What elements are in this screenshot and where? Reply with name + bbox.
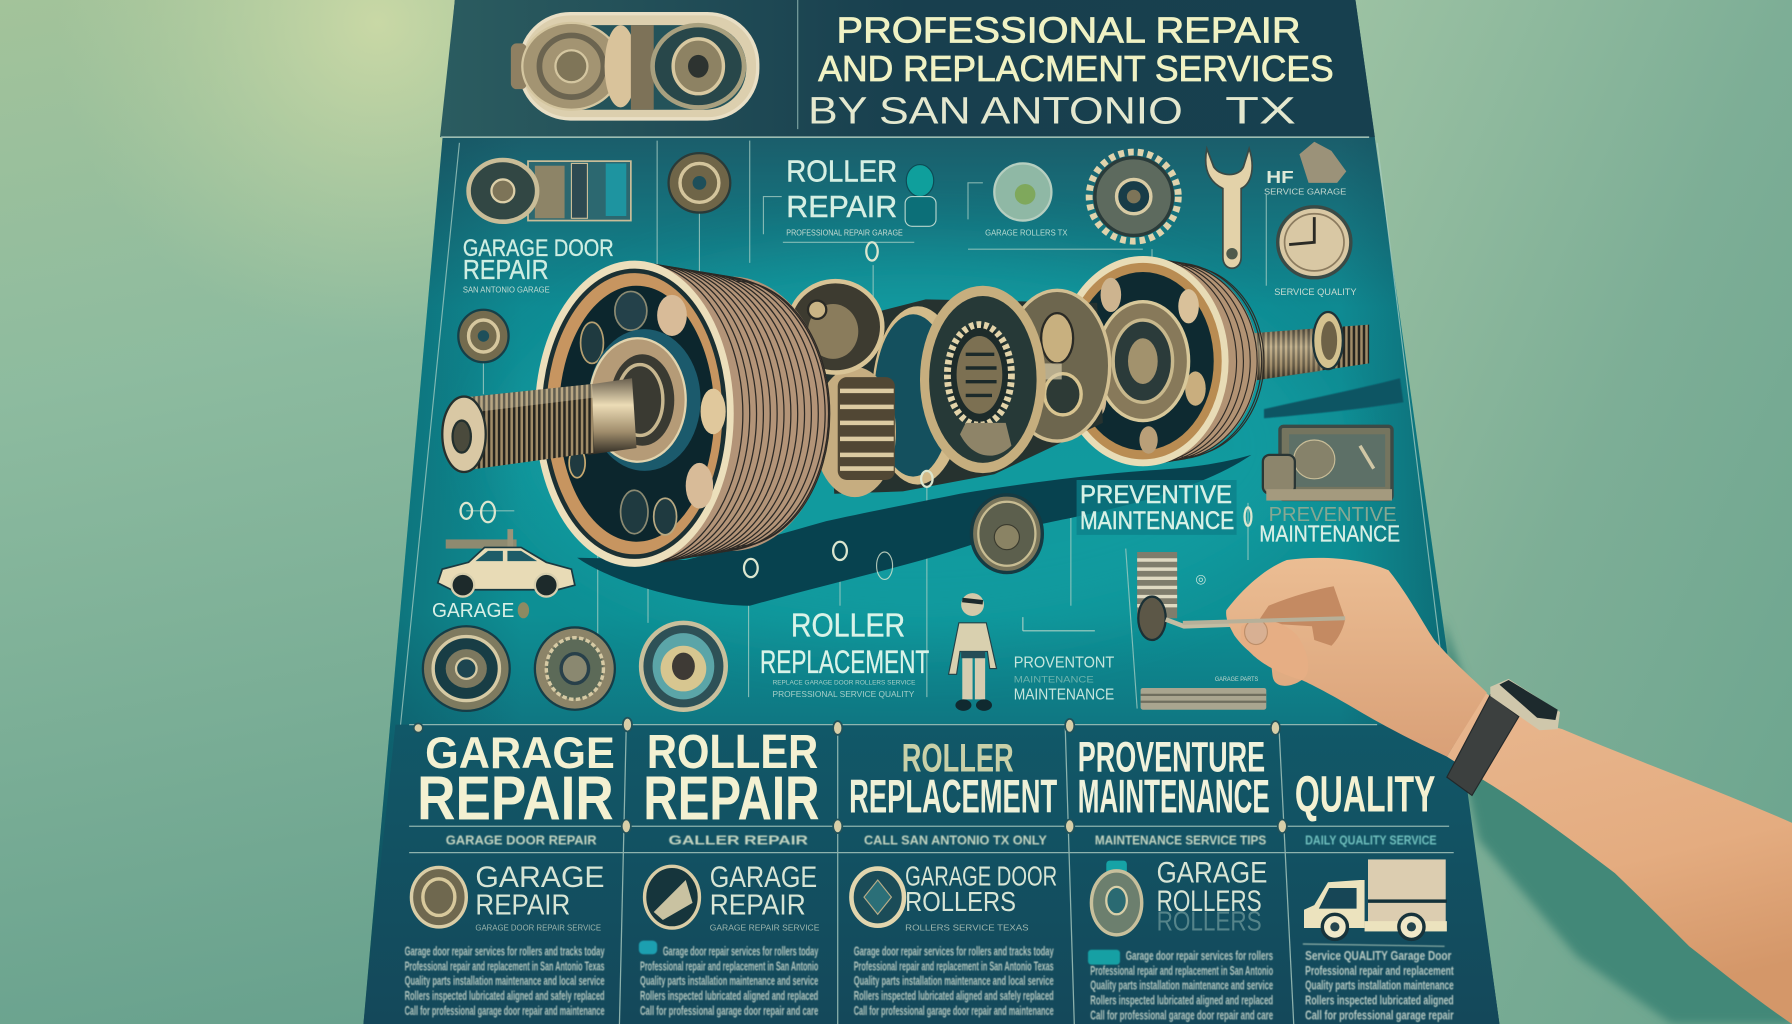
label: garage repair column two: GARAGE REPAIR SERVICE bbox=[710, 923, 819, 932]
disc A bbox=[789, 281, 882, 373]
icon: column four medallion bbox=[1091, 861, 1142, 935]
header band bbox=[440, 0, 1375, 137]
icon: disk three bbox=[641, 623, 726, 710]
label: proventont maintenance: MAINTENANCE bbox=[1014, 674, 1094, 684]
label: garage door rollers bbox=[905, 861, 1057, 932]
body text: column five bbox=[1303, 944, 1454, 1022]
label: roller replacement: ROLLER bbox=[791, 608, 905, 645]
top row icon: wheel and door unit bbox=[469, 160, 631, 222]
label: roller repair: REPAIR bbox=[786, 189, 897, 224]
hand and arm bbox=[1183, 558, 1792, 1024]
label: garage door rollers: ROLLERS SERVICE TEXAS bbox=[905, 923, 1029, 932]
title: PROFESSIONAL REPAIR bbox=[837, 9, 1301, 50]
arm bbox=[1447, 693, 1792, 1024]
tool in hand bbox=[1183, 618, 1345, 623]
title: AND REPLACMENT SERVICES bbox=[818, 48, 1334, 89]
body text: column three: Rollers inspected lubricated aligned and safely replaced bbox=[854, 989, 1054, 1003]
icon: delivery truck bbox=[1304, 859, 1447, 939]
label: garage repair column one: GARAGE DOOR REPAIR SERVICE bbox=[475, 923, 601, 932]
thumb bbox=[1241, 620, 1308, 680]
face rim bbox=[535, 261, 734, 567]
column heading: roller repair bbox=[643, 726, 819, 833]
wall background right bbox=[1349, 0, 1792, 1024]
poster sheet bbox=[363, 0, 1499, 1024]
body text: column three: Professional repair and replacement in San Antonio Texas bbox=[854, 959, 1054, 973]
label: preventive maintenance: PREVENTIVE bbox=[1080, 481, 1232, 509]
column heading: proventure maintenance: PROVENTURE bbox=[1078, 733, 1265, 780]
icon: column two medallion bbox=[645, 866, 699, 928]
label: garage rollers: ROLLERS bbox=[1157, 905, 1262, 936]
label: preventive maintenance faded: MAINTENANCE bbox=[1259, 521, 1400, 547]
body text: column three: Call for professional garage door repair and maintenance bbox=[854, 1004, 1054, 1018]
sub heading strip: MAINTENANCE SERVICE TIPS bbox=[1095, 834, 1266, 848]
label: preventive maintenance faded: PREVENTIVE bbox=[1269, 503, 1397, 526]
label: garage door repair: GARAGE DOOR bbox=[463, 235, 614, 262]
title bbox=[808, 9, 1334, 131]
icon: floor disk bbox=[971, 495, 1042, 573]
label: garage rollers bbox=[1157, 856, 1267, 936]
main big roller wheel bbox=[442, 261, 830, 567]
label: roller replacement: PROFESSIONAL SERVICE QUALITY bbox=[773, 690, 915, 699]
body text: column two bbox=[639, 941, 818, 1018]
bearing holes bbox=[569, 291, 726, 535]
body text: column one: Professional repair and replacement in San Antonio Texas bbox=[405, 959, 605, 973]
label: garage: GARAGE bbox=[432, 599, 514, 622]
caption under clock: SERVICE QUALITY bbox=[1274, 287, 1357, 297]
icon: HF mark: HF bbox=[1266, 167, 1294, 187]
body text: column one: Garage door repair services for rollers and tracks today bbox=[405, 944, 605, 958]
sub heading strip: GARAGE DOOR REPAIR bbox=[446, 834, 597, 848]
icon: HF mark bbox=[1264, 142, 1346, 196]
body text: column four: Garage door repair services for rollers bbox=[1126, 949, 1273, 963]
hub bbox=[589, 329, 701, 471]
icon: striped plate and tool: ◎ bbox=[1195, 572, 1206, 586]
left threaded shaft bbox=[585, 378, 637, 455]
finger fold bbox=[1257, 586, 1345, 646]
title: TX bbox=[1225, 89, 1296, 131]
body text: column four: Quality parts installation maintenance and service bbox=[1090, 979, 1273, 993]
column heading: garage repair: REPAIR bbox=[417, 764, 614, 833]
label: garage door rollers: GARAGE DOOR bbox=[905, 861, 1057, 892]
label: garage rollers: GARAGE bbox=[1157, 856, 1267, 889]
gear disc D bbox=[920, 286, 1046, 473]
label: roller replacement: REPLACE GARAGE DOOR ROLLERS SERVICE bbox=[773, 680, 916, 687]
middle gear assembly bbox=[789, 281, 1110, 497]
icon: wrench bbox=[1206, 149, 1252, 268]
label: roller replacement: REPLACEMENT bbox=[760, 644, 929, 680]
dark floor shadow of roller bbox=[577, 455, 1251, 606]
column heading: proventure maintenance: MAINTENANCE bbox=[1078, 771, 1270, 823]
icon: striped plate and tool bbox=[1137, 552, 1346, 640]
body text: column four bbox=[1088, 949, 1273, 1022]
column heading: roller repair: ROLLER bbox=[647, 726, 818, 779]
body text: column five: Rollers inspected lubricated aligned bbox=[1305, 994, 1454, 1008]
body text: column four: Professional repair and replacement in San Antonio bbox=[1090, 964, 1273, 978]
sub heading strip bbox=[446, 834, 1437, 848]
body text: column four: Rollers inspected lubricated aligned and replaced bbox=[1090, 994, 1273, 1008]
sub heading strip: CALL SAN ANTONIO TX ONLY bbox=[864, 834, 1047, 848]
backing bbox=[823, 299, 1103, 494]
label: preventive maintenance: MAINTENANCE bbox=[1080, 507, 1234, 535]
body text: column two: Call for professional garage door repair and care bbox=[640, 1004, 818, 1018]
tread bbox=[633, 262, 830, 566]
upper right streak shadow bbox=[1264, 378, 1403, 418]
body text: column two: Quality parts installation maintenance and service bbox=[640, 974, 818, 988]
arm shadow on wall bbox=[1442, 617, 1792, 1024]
sub heading strip: DAILY QUALITY SERVICE bbox=[1305, 834, 1437, 848]
header icon: roller pill bbox=[511, 14, 758, 119]
label: roller repair: ROLLER bbox=[786, 154, 897, 189]
leader lines bbox=[370, 141, 1487, 1024]
column heading: roller repair: REPAIR bbox=[643, 764, 819, 833]
label: garage door repair: SAN ANTONIO GARAGE bbox=[463, 286, 550, 295]
icon: clock bbox=[1278, 207, 1351, 278]
icon: HF mark: SERVICE GARAGE bbox=[1264, 187, 1346, 196]
body text: column three: Garage door repair services for rollers and tracks today bbox=[854, 944, 1054, 958]
body text: column five: Service QUALITY Garage Door bbox=[1305, 949, 1452, 963]
wristwatch bbox=[1447, 679, 1560, 795]
body text: column four: Call for professional garage door repair and care bbox=[1090, 1008, 1273, 1022]
icon: column three medallion bbox=[851, 869, 904, 926]
label: garage rollers: ROLLERS bbox=[1157, 885, 1262, 918]
label: roller repair bbox=[786, 154, 903, 237]
body text: column one bbox=[405, 944, 605, 1018]
label: proventont maintenance bbox=[1014, 617, 1114, 703]
column heading: garage repair: GARAGE bbox=[425, 729, 615, 778]
body text: column five: Professional repair and replacement bbox=[1305, 964, 1454, 978]
title: BY SAN ANTONIO bbox=[808, 89, 1183, 131]
label: garage repair column two: GARAGE bbox=[710, 861, 817, 894]
icon: control machine bbox=[1263, 426, 1392, 501]
hand bbox=[1226, 558, 1487, 757]
label: garage door repair bbox=[463, 235, 614, 295]
body text: column five: Call for professional garage repair bbox=[1305, 1008, 1454, 1022]
column heading: roller replacement: ROLLER bbox=[902, 736, 1014, 780]
icon: gear bbox=[1089, 152, 1178, 241]
label: garage repair column one bbox=[475, 861, 605, 932]
icon: worker figure bbox=[949, 593, 997, 711]
label: preventive maintenance faded bbox=[1259, 503, 1400, 547]
icon: glass lens bbox=[985, 163, 1068, 237]
label: garage repair column two bbox=[710, 861, 819, 932]
icon: metal bar: GARAGE PARTS bbox=[1215, 676, 1259, 683]
body text: column one: Call for professional garage door repair and maintenance bbox=[405, 1004, 605, 1018]
label: garage door rollers: ROLLERS bbox=[905, 886, 1016, 917]
column heading: proventure maintenance bbox=[1078, 733, 1270, 823]
icon: car bbox=[438, 529, 575, 597]
label: garage door repair: REPAIR bbox=[463, 254, 549, 285]
right roller assembly bbox=[1057, 256, 1369, 466]
icon: disk one bbox=[423, 626, 510, 711]
body text: column three: Quality parts installation maintenance and local service bbox=[854, 974, 1054, 988]
bottom table bbox=[363, 718, 1499, 1024]
column heading: roller replacement bbox=[849, 736, 1057, 823]
label: proventont maintenance: MAINTENANCE bbox=[1014, 686, 1114, 703]
icon: glass lens: GARAGE ROLLERS TX bbox=[985, 228, 1068, 237]
body text: column two: Garage door repair services for rollers today bbox=[663, 944, 818, 958]
icon: top disk bbox=[669, 153, 730, 213]
teal centre glow bbox=[503, 251, 1326, 640]
body text: column one: Rollers inspected lubricated aligned and safely replaced bbox=[405, 989, 605, 1003]
label: garage repair column one: GARAGE bbox=[475, 861, 605, 894]
ring C bbox=[872, 306, 963, 485]
sub heading strip: GALLER REPAIR bbox=[669, 834, 808, 848]
label: roller replacement bbox=[760, 608, 929, 699]
icon: teal badge bbox=[905, 165, 936, 226]
body text: column two: Professional repair and replacement in San Antonio bbox=[640, 959, 818, 973]
column heading: garage repair bbox=[417, 729, 615, 833]
label: garage repair column one: REPAIR bbox=[475, 889, 570, 921]
label: proventont maintenance: PROVENTONT bbox=[1014, 654, 1114, 671]
column heading: roller replacement: REPLACEMENT bbox=[849, 771, 1057, 823]
disc E bbox=[1005, 290, 1110, 441]
table pins bbox=[414, 718, 1287, 833]
body text: column one: Quality parts installation maintenance and local service bbox=[405, 974, 605, 988]
column heading: quality: QUALITY bbox=[1295, 764, 1435, 822]
icon: metal bar bbox=[1141, 676, 1266, 710]
icon: left disk bbox=[458, 310, 509, 362]
body text: column five: Quality parts installation maintenance bbox=[1305, 979, 1454, 993]
label: preventive maintenance bbox=[1077, 480, 1237, 535]
striped collar B bbox=[814, 367, 896, 497]
icon: column one medallion bbox=[411, 867, 466, 927]
body text: column two: Rollers inspected lubricated aligned and replaced bbox=[640, 989, 818, 1003]
body text: column three bbox=[854, 944, 1054, 1018]
connector pins bbox=[461, 242, 1251, 579]
icon: disk two bbox=[535, 627, 615, 710]
label: roller repair: PROFESSIONAL REPAIR GARAGE bbox=[786, 228, 903, 237]
label: garage repair column two: REPAIR bbox=[710, 889, 806, 921]
